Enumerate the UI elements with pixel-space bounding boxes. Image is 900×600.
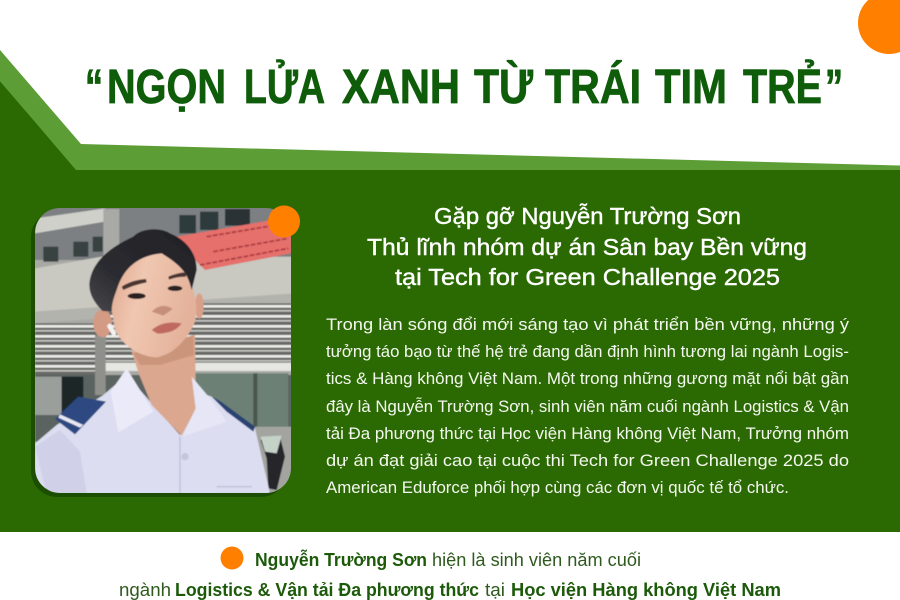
text block: footer statement: tại (485, 579, 505, 600)
title: TIM (655, 61, 727, 114)
text block: footer statement (119, 549, 781, 600)
text block: footer statement: Học viện Hàng không Việt Nam (511, 579, 781, 600)
neck (132, 335, 196, 436)
icon: orange photo badge (268, 206, 300, 238)
face (112, 253, 196, 357)
text block: body paragraph: đây là Nguyễn Trường Sơn, sinh viên năm cuối ngành Logistics & Vận (326, 397, 849, 416)
header: light green band (0, 50, 900, 171)
title (85, 59, 843, 114)
title: “ (85, 61, 103, 114)
text block: body paragraph: Trong làn sóng đổi mới sáng tạo vì phát triển bền vững, những ý (326, 315, 850, 334)
shirt (35, 375, 270, 493)
brows (122, 279, 147, 290)
photo: portrait of Nguyễn Trường Sơn (31, 207, 293, 497)
text block: body paragraph (326, 315, 850, 497)
heading: introduction (367, 203, 807, 290)
title: XANH (342, 61, 460, 114)
title: TỪ (474, 59, 533, 114)
nose (152, 306, 173, 316)
text block: footer statement: hiện là sinh viên năm cuối (432, 549, 641, 570)
title: ” (825, 61, 843, 114)
title: NGỌN (107, 61, 226, 114)
collar (111, 368, 153, 432)
heading: introduction: Thủ lĩnh nhóm dự án Sân bay Bền vững (367, 234, 807, 260)
text block: body paragraph: tải Đa phương thức tại Học viện Hàng không Việt Nam, Trưởng nhóm (326, 424, 849, 443)
text block: footer statement: Logistics & Vận tải Đa phương thức (175, 579, 479, 600)
text block: body paragraph: tics & Hàng không Việt Nam. Một trong những gương mặt nổi bật gần (326, 369, 849, 388)
eyes (128, 293, 146, 299)
ears (93, 309, 112, 337)
heading: introduction: Gặp gỡ Nguyễn Trường Sơn (434, 203, 741, 229)
earbud (106, 323, 117, 336)
text block: footer statement: Nguyễn Trường Sơn (255, 549, 427, 570)
epaulettes (55, 397, 106, 434)
title: TRÁI (545, 60, 641, 114)
mouth (152, 322, 182, 334)
title: TRẺ (743, 59, 822, 114)
heading: introduction: tại Tech for Green Challenge 2025 (395, 264, 780, 290)
text block: footer statement: ngành (119, 579, 171, 600)
text block: body paragraph: tưởng táo bạo từ thế hệ trẻ đang dần định hình tương lai ngành Logis- (326, 342, 849, 361)
hair (89, 229, 197, 312)
text block: body paragraph: American Eduforce phối hợp cùng các đơn vị quốc tế tổ chức. (326, 478, 789, 497)
icon: orange bullet (220, 546, 244, 570)
motorbike (261, 437, 285, 490)
text block: body paragraph: dự án đạt giải cao tại cuộc thi Tech for Green Challenge 2025 do (326, 451, 849, 470)
title: LỬA (244, 59, 325, 114)
panel: dark green content area (0, 81, 900, 532)
icon: orange corner circle (858, 0, 900, 54)
